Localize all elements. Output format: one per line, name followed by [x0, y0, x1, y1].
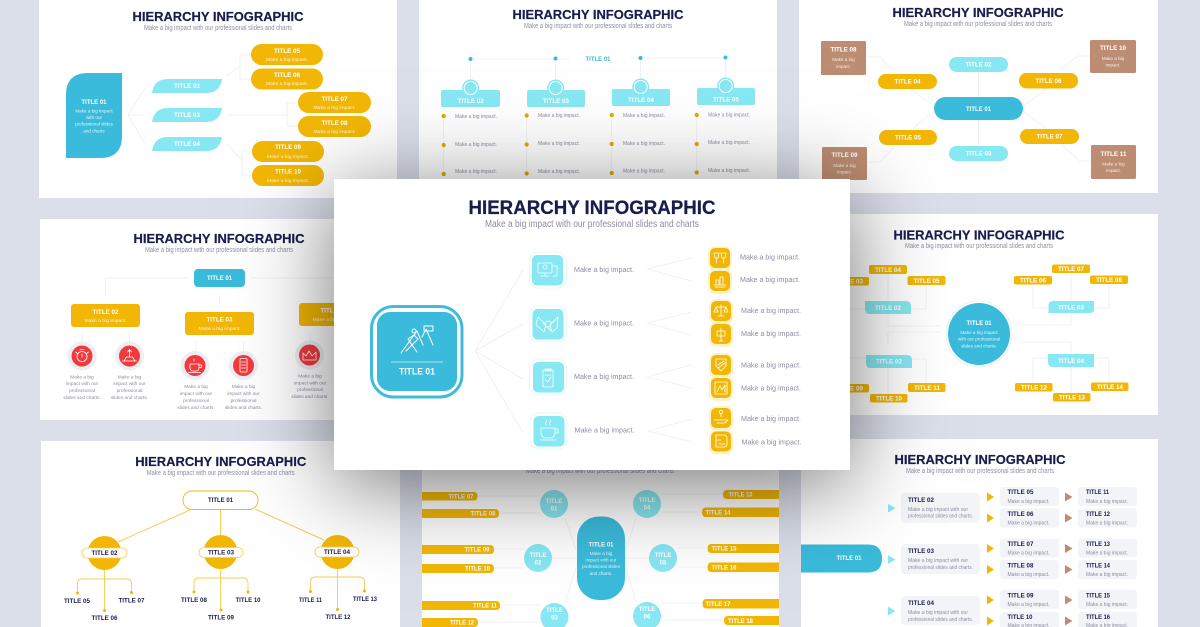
icon: glasses: [714, 253, 726, 263]
root shape: title 01: professional slides: [75, 122, 114, 126]
central circle: title 01: slides and charts.: [961, 344, 997, 348]
cyan circles: TITLE: [530, 553, 546, 559]
orange boxes: TITLE 03: [206, 318, 233, 324]
third-level cards: TITLE 09: [1008, 594, 1034, 600]
bullets column 4: Make a big impact.: [708, 112, 750, 118]
circle captions: Make a big: [298, 374, 322, 380]
orange pills: titles 05 to 10: TITLE 06: [274, 73, 301, 79]
brown boxes: impact.: [1106, 62, 1120, 68]
circle captions: professional: [69, 388, 95, 394]
cyan circles: 01: [551, 506, 558, 512]
circle captions: slides and charts.: [63, 395, 101, 401]
leaf dots and labels: TITLE 08: [181, 598, 208, 604]
right orange bars: TITLE 13: [728, 492, 753, 498]
bullets column 3: Make a big impact.: [623, 141, 665, 147]
root tile: title 01: [372, 306, 462, 397]
brown boxes: Make a big: [833, 163, 856, 168]
right orange bars: TITLE 16: [712, 566, 737, 572]
central rounded box: title 01: TITLE 01: [588, 542, 614, 548]
circle captions: professional: [297, 387, 323, 393]
orange pills: titles 05 to 10: Make a big impact.: [267, 178, 309, 183]
cyan circles: TITLE: [546, 608, 563, 614]
leaf dots and labels: TITLE 10: [236, 598, 261, 604]
connector lines: branches to leaves: [647, 258, 692, 442]
orange boxes: Make a big impact.: [198, 326, 240, 331]
central rounded box: title 01: professional slides: [582, 564, 621, 569]
orange arrows: [987, 492, 994, 626]
orange pills: TITLE 06: [1036, 79, 1062, 85]
connector lines: [478, 494, 724, 622]
orange boxes: Make a big impact.: [84, 318, 126, 323]
central circle: title 01: with our professional: [958, 336, 1000, 342]
branch row 4: [530, 413, 634, 449]
third-level cards: TITLE 06: [1008, 512, 1034, 518]
orange boxes: Make a big impact.: [312, 317, 354, 322]
cyan circles: 05: [660, 560, 667, 566]
branch row 1: [530, 252, 634, 288]
central rounded box: title 01: and charts.: [590, 571, 612, 576]
orange chips: TITLE 09: [837, 386, 864, 392]
orange chips: TITLE 07: [1058, 267, 1085, 273]
leaf row 6: Make a big impact.: [741, 384, 801, 392]
leaf dots and labels: [64, 590, 378, 622]
orange pills: [878, 73, 1079, 145]
bullets column 3: [610, 113, 665, 175]
panel: background slide middle right: [815, 214, 1158, 415]
leaf dots and labels: TITLE 12: [326, 615, 351, 621]
leaf dots and labels: TITLE 13: [353, 597, 378, 603]
brown boxes: impact.: [1106, 168, 1121, 173]
orange pills: titles 05 to 10: Make a big impact.: [267, 154, 309, 159]
cyan circles: [524, 490, 677, 627]
bullets column 2: [525, 113, 580, 176]
top dots and title 01: [468, 56, 728, 63]
left orange bars: TITLE 07: [448, 494, 474, 500]
heading: HIERARCHY INFOGRAPHIC: [134, 231, 305, 246]
cyan circles: TITLE: [655, 553, 671, 559]
central pill: title 01: TITLE 01: [966, 107, 992, 113]
circle captions: impact with our: [180, 391, 213, 397]
subtitle: Make a big impact with our professional slides and charts: [147, 470, 295, 477]
circle captions: professional: [117, 388, 142, 394]
bullets column 3: Make a big impact.: [623, 168, 665, 174]
third-level cards: TITLE 08: [1008, 564, 1034, 570]
leaf dots and labels: TITLE 09: [208, 616, 235, 622]
leaf dots and labels: TITLE 05: [64, 599, 91, 605]
leaf nodes: titles 02 to 04: TITLE 04: [174, 142, 201, 148]
root tab: title 01: [801, 544, 882, 572]
right orange bars: TITLE 14: [706, 510, 731, 516]
leaf dots and labels: TITLE 06: [92, 616, 118, 622]
bullets column 4: Make a big impact.: [708, 168, 750, 174]
icon: building chart: [714, 277, 726, 287]
title 01 box: [194, 269, 245, 287]
orange pills: titles 05 to 10: TITLE 09: [275, 145, 302, 151]
brown boxes: Make a big: [832, 57, 855, 62]
fourth-level cards: TITLE 16: [1086, 615, 1111, 621]
leaf row 3: [709, 299, 801, 324]
third-level cards: Make a big impact.: [1008, 499, 1050, 505]
cyan tabs: TITLE 02: [875, 306, 902, 312]
column headers: titles 02 to 05: [441, 78, 755, 107]
heading: HIERARCHY INFOGRAPHIC: [132, 9, 304, 24]
icon: picture frame: [715, 382, 727, 394]
leaf row 3: Make a big impact.: [741, 306, 801, 315]
branch row 2: Make a big impact.: [574, 318, 634, 328]
orange pills: TITLE 04: [894, 80, 921, 86]
icon: monitor: [538, 263, 557, 276]
icon: climber and flag on mountain: [401, 326, 433, 353]
cyan circles: TITLE: [639, 498, 655, 504]
orange pills: titles 05 to 10: TITLE 10: [275, 170, 302, 176]
bullets column 1: Make a big impact.: [455, 142, 497, 148]
brown boxes: Make a big: [1102, 162, 1125, 166]
fourth-level cards: Make a big impact.: [1086, 602, 1128, 608]
second-level cards: TITLE 02: [908, 498, 935, 504]
orange chips: TITLE 08: [1096, 278, 1123, 284]
connector lines: [850, 273, 1109, 394]
leaf row 6: [709, 376, 801, 401]
leaf row 4: [709, 322, 801, 347]
cyan pills: TITLE 02: [966, 62, 992, 68]
second-level cards: professional slides and charts.: [908, 514, 973, 520]
left orange bars: TITLE 08: [470, 512, 496, 518]
top dots and title 01: TITLE 01: [586, 57, 611, 63]
brown boxes: TITLE 08: [830, 48, 857, 54]
circle captions: Make a big: [70, 374, 94, 380]
bullets column 1: [442, 114, 497, 176]
second-level cards: Make a big impact with our: [908, 558, 968, 564]
orange discs: TITLE 03: [208, 551, 235, 557]
panel: background slide middle left: [40, 219, 380, 420]
central pill: title 01: [934, 97, 1023, 120]
third-level cards: Make a big impact.: [1008, 550, 1050, 556]
left orange bars: TITLE 10: [465, 566, 491, 572]
bullets column 4: [695, 112, 750, 175]
panel: background slide top left: [39, 0, 397, 198]
subtitle: Make a big impact with our professional slides and charts: [906, 468, 1054, 475]
heading: HIERARCHY INFOGRAPHIC: [135, 454, 307, 469]
cyan pills: TITLE 03: [966, 152, 992, 158]
leaf nodes: titles 02 to 04: TITLE 03: [174, 113, 201, 119]
connector lines: [444, 58, 726, 174]
circle captions: slides and charts.: [225, 405, 262, 411]
orange boxes: TITLE 02: [92, 310, 119, 316]
circle captions: slides and charts.: [291, 394, 329, 400]
subtitle: Make a big impact with our professional slides and charts: [145, 247, 293, 254]
orange pills: titles 05 to 10: Make a big impact.: [266, 57, 308, 62]
second-level cards: professional slides and charts.: [908, 617, 973, 623]
branch row 3: [530, 359, 634, 395]
second-level cards: TITLE 04: [908, 601, 935, 607]
column headers: titles 02 to 05: TITLE 03: [543, 99, 570, 105]
orange boxes: TITLE 04: [320, 308, 347, 314]
orange discs: [82, 535, 359, 570]
brown boxes: impact.: [836, 64, 851, 69]
circle captions: impact with our: [66, 381, 99, 387]
icon: handshake: [536, 317, 558, 332]
leaf row 8: [709, 430, 802, 454]
brown boxes: Make a big: [1102, 56, 1125, 61]
leaf row 7: Make a big impact.: [741, 414, 801, 423]
fourth-level cards: [1078, 487, 1137, 627]
orange pills: titles 05 to 10: Make a big impact.: [314, 105, 356, 110]
fourth-level cards: Make a big impact.: [1086, 499, 1128, 505]
heading: HIERARCHY INFOGRAPHIC: [512, 7, 684, 22]
orange discs: TITLE 02: [92, 551, 118, 557]
right orange bars: TITLE 17: [706, 602, 731, 608]
leaf nodes: titles 02 to 04: [152, 79, 222, 151]
third-level cards: TITLE 10: [1008, 615, 1033, 621]
right orange bars: TITLE 15: [712, 546, 737, 552]
subtitle: Make a big impact with our professional slides and charts: [905, 243, 1053, 250]
connector lines: [118, 509, 324, 542]
subtitle: Make a big impact with our professional slides and charts: [524, 23, 672, 30]
bullets column 2: Make a big impact.: [538, 141, 580, 147]
cyan arrows: [888, 504, 896, 616]
leaf row 7: [709, 406, 801, 431]
root shape: title 01: [66, 73, 122, 158]
panel: background slide bottom middle: [422, 440, 779, 627]
leaf row 1: Make a big impact.: [740, 252, 800, 262]
cyan circles: 04: [644, 506, 651, 512]
title 01 pill: TITLE 01: [208, 498, 234, 504]
orange chips: TITLE 03: [837, 280, 864, 286]
cyan pills: [949, 57, 1008, 161]
fourth-level cards: TITLE 12: [1086, 512, 1111, 518]
root shape: title 01: TITLE 01: [82, 100, 107, 106]
leaf dots and labels: TITLE 11: [299, 598, 323, 604]
leaf nodes: titles 02 to 04: TITLE 02: [174, 84, 201, 90]
central rounded box: title 01: impact with our: [586, 558, 617, 562]
orange pills: TITLE 05: [895, 136, 922, 142]
root tab: title 01: TITLE 01: [836, 556, 862, 562]
orange chips: TITLE 04: [875, 268, 902, 274]
second-level cards: [901, 493, 980, 625]
brown arrows: [1065, 492, 1072, 626]
heading: HIERARCHY INFOGRAPHIC: [894, 452, 1066, 467]
cyan tabs: TITLE 03: [1058, 306, 1085, 312]
orange pills: titles 05 to 10: TITLE 05: [274, 49, 301, 55]
panel: background slide top middle: [419, 0, 777, 180]
orange pills: titles 05 to 10: Make a big impact.: [314, 129, 356, 134]
central rounded box: title 01: Make a big: [590, 551, 613, 556]
third-level cards: TITLE 05: [1008, 490, 1034, 496]
orange pills: TITLE 07: [1036, 134, 1063, 140]
orange chips: TITLE 05: [914, 279, 940, 285]
subtitle: Make a big impact with our professional slides and charts: [526, 468, 674, 475]
orange pills: titles 05 to 10: [251, 44, 371, 186]
cyan circles: 02: [535, 560, 542, 566]
circle captions: Make a big: [232, 384, 256, 390]
third-level cards: Make a big impact.: [1008, 602, 1050, 608]
circle captions: slides and charts.: [177, 405, 215, 411]
cyan tabs: TITLE 04: [1058, 359, 1085, 365]
orange pills: titles 05 to 10: TITLE 07: [322, 97, 348, 103]
orange pills: titles 05 to 10: TITLE 08: [322, 121, 348, 127]
brown boxes: TITLE 09: [832, 153, 858, 159]
brown boxes: TITLE 11: [1100, 152, 1127, 158]
icon: clipboard: [543, 369, 553, 387]
left orange bars: TITLE 09: [464, 548, 490, 554]
cyan circles: TITLE: [546, 499, 562, 505]
branch row 1: Make a big impact.: [574, 265, 634, 274]
connector lines: [867, 56, 1091, 162]
branch row 4: Make a big impact.: [574, 426, 634, 434]
icon: hand with person: [714, 414, 728, 423]
third-level cards: Make a big impact.: [1008, 520, 1050, 526]
brown boxes: [821, 40, 1136, 180]
leaf row 5: Make a big impact.: [741, 360, 801, 370]
third-level cards: TITLE 07: [1008, 542, 1034, 548]
brown boxes: TITLE 10: [1100, 46, 1127, 52]
circle captions: impact with our: [113, 381, 146, 387]
central circle: title 01: TITLE 01: [966, 321, 992, 327]
central circle: title 01: Make a big impact: [960, 330, 998, 335]
fourth-level cards: TITLE 15: [1086, 594, 1111, 600]
right orange bars: TITLE 18: [728, 619, 754, 625]
leaf row 1: [708, 246, 800, 271]
orange chips: [831, 264, 1128, 402]
bullets column 1: Make a big impact.: [455, 169, 497, 175]
third-level cards: [1000, 487, 1059, 627]
fourth-level cards: TITLE 14: [1086, 564, 1111, 570]
title 01 pill: [183, 491, 258, 510]
icon: signpost: [717, 328, 725, 341]
subtitle: Make a big impact with our professional slides and charts: [485, 219, 699, 230]
central rounded box: title 01: [577, 516, 625, 600]
panel: main hierarchy infographic: [334, 179, 850, 470]
left orange bars: TITLE 12: [450, 620, 475, 626]
bullets column 2: Make a big impact.: [538, 113, 580, 119]
circle captions: Make a big: [118, 374, 142, 380]
root shape: title 01: and charts: [83, 128, 105, 134]
icon: shield: [716, 359, 726, 371]
central circle: title 01: [946, 301, 1012, 367]
circle captions: professional: [231, 398, 256, 404]
circle captions: [63, 374, 329, 411]
fourth-level cards: Make a big impact.: [1086, 550, 1128, 556]
circle captions: professional: [183, 398, 209, 404]
panel: background slide bottom right: [801, 439, 1158, 627]
orange boxes: [71, 303, 368, 335]
root tile: title 01: TITLE 01: [399, 366, 435, 376]
panel: background slide bottom left: [41, 441, 400, 627]
orange chips: TITLE 12: [1021, 386, 1048, 392]
leaf row 2: Make a big impact.: [740, 275, 800, 284]
circle captions: impact with our: [294, 380, 327, 386]
bullets column 3: Make a big impact.: [623, 113, 665, 119]
icon: coffee cup: [540, 420, 558, 440]
right orange bars: [702, 490, 779, 625]
fourth-level cards: Make a big impact.: [1086, 520, 1128, 526]
left orange bars: [422, 492, 500, 627]
orange chips: TITLE 06: [1020, 278, 1047, 284]
circle captions: Make a big: [184, 384, 208, 390]
heading: HIERARCHY INFOGRAPHIC: [892, 5, 1064, 20]
fourth-level cards: TITLE 13: [1086, 542, 1111, 548]
third-level cards: Make a big impact.: [1008, 572, 1050, 578]
branch row 3: Make a big impact.: [574, 372, 634, 381]
red icon circles: [68, 340, 324, 380]
cyan circles: 06: [644, 614, 651, 620]
subtitle: Make a big impact with our professional slides and charts: [144, 25, 292, 32]
second-level cards: Make a big impact with our: [908, 507, 968, 513]
leaf row 2: [708, 269, 800, 294]
orange chips: TITLE 13: [1059, 396, 1086, 402]
icon: document with seal: [716, 435, 727, 447]
bullets column 4: Make a big impact.: [708, 140, 750, 146]
tree branches: [78, 569, 364, 610]
second-level cards: professional slides and charts.: [908, 565, 973, 571]
leaf row 8: Make a big impact.: [742, 438, 802, 446]
leaf row 4: Make a big impact.: [741, 329, 801, 338]
root shape: title 01: Make a big impact: [75, 108, 113, 114]
branch row 2: [530, 306, 634, 342]
column headers: titles 02 to 05: TITLE 04: [628, 98, 655, 104]
subtitle: Make a big impact with our professional slides and charts: [904, 21, 1052, 28]
bullets column 1: Make a big impact.: [455, 114, 497, 120]
second-level cards: Make a big impact with our: [908, 610, 968, 616]
orange chips: TITLE 11: [914, 386, 941, 392]
second-level cards: TITLE 03: [908, 549, 935, 555]
cyan tabs: [865, 301, 1094, 368]
brown boxes: impact.: [837, 170, 852, 174]
left orange bars: TITLE 11: [473, 604, 498, 610]
circle captions: slides and charts.: [111, 395, 148, 401]
orange chips: TITLE 14: [1097, 385, 1124, 391]
cyan circles: TITLE: [639, 607, 655, 613]
root shape: title 01: with our: [86, 115, 103, 120]
heading: HIERARCHY INFOGRAPHIC: [468, 198, 716, 219]
orange chips: TITLE 10: [876, 396, 903, 402]
cyan circles: 03: [551, 616, 558, 622]
leaf dots and labels: TITLE 07: [118, 599, 145, 605]
connector lines: root to branches: [475, 270, 523, 433]
fourth-level cards: TITLE 11: [1086, 490, 1110, 496]
cyan tabs: TITLE 02: [876, 360, 903, 366]
heading: HIERARCHY INFOGRAPHIC: [894, 228, 1065, 242]
bullets column 2: Make a big impact.: [538, 169, 580, 175]
icon: scales: [714, 305, 728, 316]
orange discs: TITLE 04: [324, 550, 351, 556]
circle captions: impact with our: [227, 391, 260, 397]
connector lines: [82, 278, 332, 350]
orange pills: titles 05 to 10: Make a big impact.: [266, 81, 308, 86]
panel: background slide top right: [799, 0, 1158, 193]
fourth-level cards: Make a big impact.: [1086, 572, 1128, 578]
title 01 box: TITLE 01: [207, 276, 233, 282]
column headers: titles 02 to 05: TITLE 05: [713, 98, 740, 104]
leaf row 5: [709, 353, 801, 378]
column headers: titles 02 to 05: TITLE 02: [458, 99, 484, 105]
connector lines: [128, 55, 298, 175]
